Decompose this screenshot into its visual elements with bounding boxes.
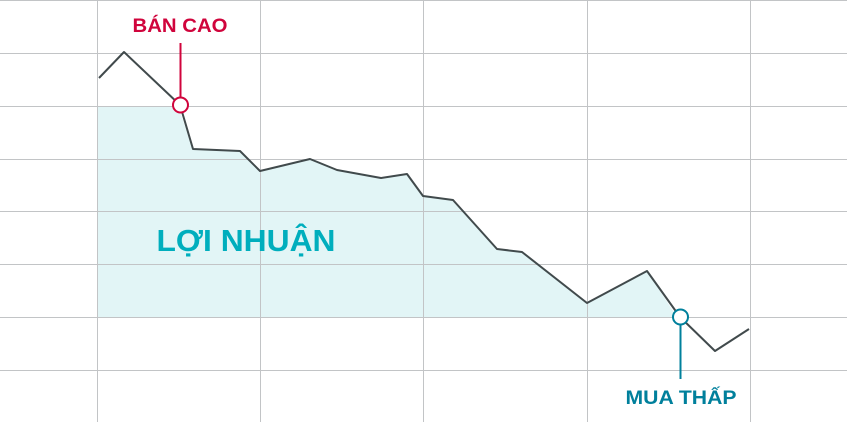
buy low marker — [673, 310, 688, 379]
price line — [99, 52, 749, 351]
label: sell high: BÁN CAO — [132, 15, 228, 37]
label: buy low: MUA THẤP — [626, 387, 737, 409]
label: profit: LỢI NHUẬN — [156, 222, 336, 258]
sell high marker — [173, 43, 188, 112]
profit shaded area — [97, 106, 677, 317]
